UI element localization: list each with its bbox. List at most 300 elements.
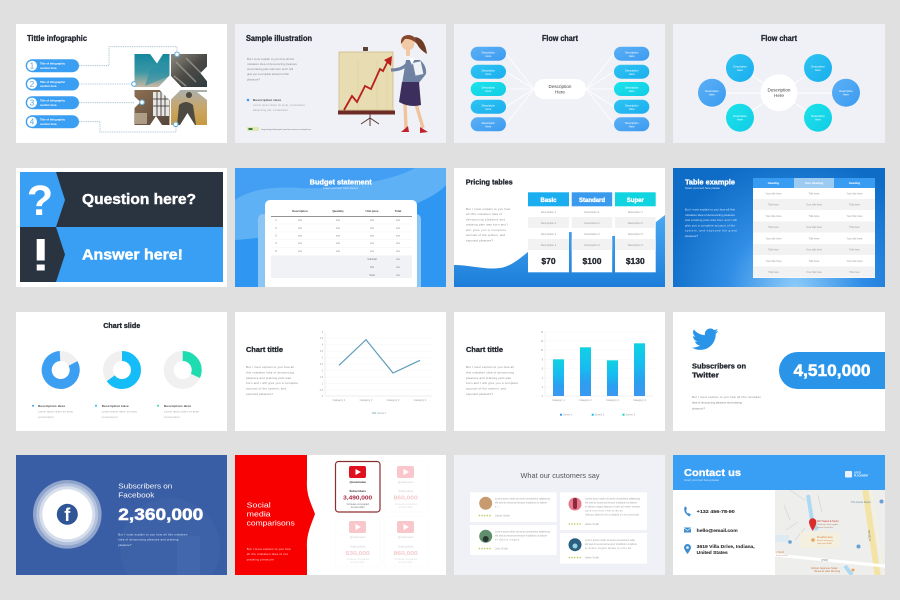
- left pills: Here: [485, 89, 492, 93]
- heading: Subscribers on Facebook: Facebook: [118, 490, 155, 500]
- legend item 1: Lorem ipsum dolor sit amet: [38, 410, 73, 414]
- testimonial 1: ★★★★★: [478, 514, 492, 518]
- data table: Title here: [809, 236, 820, 240]
- list item 4: section here.: [40, 122, 57, 126]
- budget table card: Unit price: [366, 209, 379, 213]
- list item 3: section here.: [40, 103, 57, 107]
- center circle: Description: [768, 88, 791, 92]
- legend item 3: consectetur: [164, 415, 180, 419]
- postal address: 3619 Villa Drive, Indiana,: [697, 544, 755, 549]
- list item 2: Title of infographic: [40, 80, 66, 84]
- card 2: faded: Increase compared: [395, 502, 417, 506]
- legend item 3: [157, 404, 199, 419]
- body paragraph: But I must explain to you how all this: [247, 57, 295, 61]
- budget table card: xxx: [396, 250, 401, 253]
- list item 1: 1: [30, 62, 35, 71]
- card 3: faded: 530,000: [346, 551, 370, 557]
- heading: Subscribers on Facebook: Subscribers on: [118, 482, 172, 490]
- budget table card: xxx: [396, 227, 401, 230]
- pricing card: Basic: $70: [541, 256, 556, 266]
- subscriber count pill: [779, 352, 885, 389]
- data table: Your title here: [847, 192, 863, 196]
- red side panel: [235, 455, 315, 575]
- connector lines: [506, 54, 614, 124]
- panel: title infographic slide: [16, 24, 227, 143]
- map: Wholesale food supplier: [817, 524, 839, 526]
- data table: Title here: [768, 270, 779, 274]
- budget table card: 1: [275, 218, 277, 222]
- card 1: highlighted: Subscribers: [349, 489, 366, 493]
- data table: Your title here: [766, 259, 782, 263]
- outer circles: Description: [811, 64, 825, 68]
- pricing card: Super: Description 4: [628, 243, 643, 247]
- panel: Facebook subscribers slide: [16, 455, 227, 575]
- map: (700): [821, 558, 828, 562]
- heading: Subscribers on Twitter: Twitter: [692, 370, 719, 380]
- pricing card: Standard: $100: [583, 256, 602, 266]
- body paragraph: pleasure?: [685, 234, 698, 238]
- postal address: United States: [697, 550, 728, 555]
- left pills: Description: [482, 86, 496, 90]
- small logo and footnote: Image designed by freepik, more free resources on freepik.com: [261, 128, 311, 131]
- data table: Title here: [768, 225, 779, 229]
- panel: budget statement slide: Insert your text here please: [323, 186, 359, 190]
- list item 4: Title of infographic: [40, 118, 66, 122]
- budget table card: [265, 200, 417, 290]
- outer circles: Here: [737, 68, 743, 72]
- icon: question mark: ?: [27, 177, 53, 225]
- testimonial 4: Lorem ipsum dolor sit amet consectetur adip: [585, 538, 636, 542]
- list item 2: section here.: [40, 84, 57, 88]
- body paragraph: But I must explain to you how all this mistaken: [118, 532, 188, 536]
- budget table card: Tax: [370, 265, 375, 269]
- line chart: [320, 332, 432, 415]
- budget table card: xxx: [336, 227, 341, 230]
- card 2: faded: @username: [398, 480, 414, 484]
- illustration: woman presenting growth chart: [338, 35, 428, 133]
- outer circles: Description: [811, 114, 825, 118]
- card 2: faded: to last video: [399, 505, 413, 509]
- icon: Twitter bird: [692, 328, 718, 350]
- card 1: highlighted: @username: [349, 480, 366, 484]
- body paragraph: will give you a complete: [466, 228, 506, 232]
- legend item 2: Lorem ipsum dolor sit amet: [102, 410, 137, 414]
- subscriber count pill: 4,510,000: [794, 361, 870, 380]
- testimonial 4: ★★★★★: [568, 556, 582, 560]
- stacked bar chart: 0: [542, 396, 544, 398]
- budget table card: xxx: [298, 219, 303, 222]
- body paragraph: account of the system, and: [466, 387, 506, 391]
- budget table card: 3: [275, 234, 277, 238]
- stacked bar chart: Category 4: [633, 398, 646, 402]
- panel: sample illustration slide: [235, 24, 446, 143]
- pricing card: Basic: Description 3: [541, 232, 557, 236]
- icon: Facebook rings: [33, 480, 102, 549]
- red side panel: Social: [247, 502, 271, 510]
- budget table card: Quantity: [332, 209, 344, 213]
- testimonial 3: Lorem ipsum dolor sit amet consectetur adipiscing: [585, 496, 641, 500]
- legend item 3: Lorem ipsum dolor sit amet: [164, 410, 199, 414]
- testimonial 2: ★★★★★: [478, 546, 492, 550]
- left pills: Description: [482, 103, 496, 107]
- budget table card: xxx: [336, 250, 341, 253]
- budget table card: xxx: [370, 234, 375, 238]
- body paragraph: account of the system, and: [466, 233, 505, 237]
- donut chart 1: [42, 351, 80, 389]
- line chart: 5: [322, 332, 324, 334]
- stacked bar chart: Category 1: [552, 398, 565, 402]
- map: Open from 8 AM: [817, 542, 832, 545]
- budget table card: xxx: [298, 227, 303, 230]
- legend item 1: [32, 404, 73, 419]
- left pills: Here: [485, 124, 492, 128]
- testimonial 1: Lorem ipsum dolor sit amet consectetur adipiscing: [495, 496, 551, 500]
- red side panel: media: [247, 512, 271, 518]
- panel: line chart slide: [235, 312, 446, 431]
- budget table card: xxx: [370, 227, 375, 230]
- data table: Your title here: [766, 236, 782, 240]
- pricing card: Standard: Description 4: [584, 243, 600, 247]
- body paragraph: all this mistaken idea of: [466, 212, 502, 216]
- heading: Sample illustration: Sample illustration: [246, 34, 312, 43]
- body paragraph: system, and expound the great: [685, 228, 737, 232]
- map: The Home Depot: [851, 500, 871, 504]
- pricing card: Basic: [528, 192, 569, 272]
- card 2: faded: Subscribers: [398, 489, 414, 493]
- budget table card: xxx: [396, 219, 401, 222]
- panel: Twitter subscribers slide: [673, 312, 885, 431]
- phone number: +132 456-78-90: [697, 509, 735, 514]
- outer circles: Here: [843, 92, 849, 96]
- map: Breakfast place: [817, 536, 834, 539]
- line chart: 3.5: [320, 351, 324, 353]
- testimonial 3: ★★★★★: [568, 522, 582, 526]
- pricing card: Standard: Description 3: [584, 232, 600, 236]
- testimonial 4: et dolore magna aliqua ut enim ad: [585, 546, 632, 550]
- data table: Title here: [809, 192, 820, 196]
- budget table card: xxx: [396, 234, 401, 238]
- panel: budget statement slide: [235, 168, 446, 294]
- body paragraph: pleasure and praising pain was: [466, 376, 512, 380]
- data table: Your title here: [766, 214, 782, 218]
- stacked bar chart: 10: [540, 350, 544, 352]
- budget table card: xxx: [298, 242, 303, 245]
- heading: Subscribers on Twitter: [692, 362, 746, 380]
- data table: Heading: [768, 181, 779, 185]
- legend item 3: Description Here: [164, 404, 191, 408]
- panel: flow chart pills slide: [454, 24, 665, 143]
- body paragraph: pleasure?: [118, 543, 132, 547]
- header band: LOGO: [854, 472, 861, 474]
- dashed connectors: [79, 47, 177, 132]
- donut chart 3: [169, 356, 197, 384]
- right pills: Description: [625, 68, 639, 72]
- budget table card: xxx: [396, 274, 401, 277]
- line chart: 4.5: [320, 338, 324, 340]
- center circle: [760, 74, 798, 111]
- icon: location pin: [684, 544, 691, 554]
- heading: Budget statement: Budget statement: [310, 180, 372, 186]
- outer circles: Here: [815, 118, 821, 122]
- body paragraph: idea of denouncing pleasure and praising: [118, 538, 179, 542]
- header band: PLACEMENT: [854, 474, 869, 478]
- body paragraph: [247, 57, 297, 82]
- map: [775, 488, 885, 578]
- left pills: Here: [485, 54, 492, 58]
- budget table card: xxx: [298, 234, 303, 238]
- right pills: Description: [625, 121, 639, 125]
- legend item 1: consectetur: [38, 415, 54, 419]
- outer circles: Here: [815, 68, 821, 72]
- data table: Your title here: [847, 214, 863, 218]
- budget table card: xxx: [336, 234, 341, 238]
- body paragraph: [692, 395, 761, 410]
- data table: Your title here: [806, 248, 823, 252]
- body paragraph: denouncing pleasure and: [466, 218, 505, 222]
- card 2: faded: 860,000: [394, 496, 418, 502]
- testimonial 2: [470, 525, 557, 555]
- line chart: 0: [322, 396, 324, 398]
- data table: [753, 178, 875, 278]
- pricing card: Super: Description 3: [628, 232, 643, 236]
- body paragraph: and praising pain was born and I will: [685, 218, 737, 222]
- right pills: Description: [625, 103, 639, 107]
- map: Kobuto Japanese Steak: [811, 567, 838, 570]
- testimonial 1: et.: [495, 504, 501, 508]
- map: Brunch restaurant: [817, 539, 833, 542]
- connector lines: [712, 68, 846, 118]
- body paragraph: this mistaken idea of denouncing: [246, 370, 294, 374]
- stacked bar chart: 6: [542, 368, 544, 370]
- line chart: Series 1: [377, 411, 387, 415]
- outer circles: Description: [705, 89, 719, 93]
- body paragraph: But I must explain to you how: [466, 207, 511, 211]
- budget table card: xxx: [370, 219, 375, 222]
- legend item 2: consectetur: [102, 415, 118, 419]
- outer circles: Here: [709, 92, 715, 96]
- icon: question mark: [20, 172, 65, 227]
- pricing card: Super: Super: [627, 198, 644, 204]
- bullet description: [247, 98, 305, 112]
- testimonial 3: quis nostrud exercitation: [585, 508, 624, 512]
- list item 3: Title of infographic: [40, 99, 66, 103]
- icon: Facebook rings: f: [64, 505, 71, 525]
- pricing card: Super: $130: [626, 256, 645, 266]
- panel: customer testimonials slide: [454, 455, 665, 575]
- pricing card: Super: Description 2: [628, 221, 643, 225]
- legend item 2: Description Here: [102, 404, 129, 408]
- body paragraph: pleasure and praising pain was: [246, 376, 292, 380]
- data table: Title here: [849, 202, 860, 206]
- outer circles: [698, 54, 860, 132]
- map: Indiana Food Hub: [817, 527, 834, 529]
- heading: Flow chart: Flow chart: [542, 34, 578, 43]
- budget table card: Subtotal: [367, 257, 377, 261]
- stacked bar chart: Category 2: [579, 398, 592, 402]
- icon: envelope: [684, 528, 691, 532]
- stacked bar chart: 2: [542, 387, 544, 389]
- outer circles: Here: [737, 118, 743, 122]
- list item 3: 3: [30, 99, 35, 108]
- heading: Question here?: Question here?: [82, 191, 196, 208]
- legend item 2: [95, 404, 137, 419]
- panel: chart slide with donuts: [16, 312, 227, 431]
- header band: Contact us: [684, 467, 741, 479]
- data table: Title here: [849, 270, 860, 274]
- body paragraph: [466, 365, 518, 396]
- pricing card: Standard: [572, 192, 612, 272]
- right pills: Description: [625, 86, 639, 90]
- pricing card: Super: Description 1: [628, 210, 643, 214]
- line chart: Category 1: [333, 398, 346, 402]
- right pills: Here: [629, 54, 635, 58]
- left pills: Description: [482, 68, 496, 72]
- body paragraph: pleasure?: [692, 406, 705, 410]
- budget table card: xxx: [336, 242, 341, 245]
- testimonial 4: elit sed do eiusmod tempor incididunt ut labore: [585, 542, 638, 546]
- list item 1: Title of infographic: [40, 62, 66, 66]
- bullet description: Lorem ipsum dolor sit amet, consectetur: [253, 103, 305, 107]
- card 4: faded: Increase compared: [395, 557, 417, 561]
- body paragraph: mistaken idea of denouncing pleasure: [247, 62, 297, 66]
- testimonial 1: [470, 492, 557, 522]
- card 4: faded: to last video: [399, 560, 413, 564]
- subscriber count: 2,360,000: [118, 505, 203, 524]
- pricing card: Basic: Basic: [540, 198, 557, 204]
- left pills: Description: [482, 121, 496, 125]
- panel: question and answer slide: [16, 168, 227, 287]
- map: J Sushi: [776, 551, 785, 554]
- stacked bar chart: Series 1: [563, 413, 573, 417]
- heading: Chart tittle: Chart tittle: [246, 345, 283, 354]
- testimonial 2: elit sed do eiusmod tempor incididunt ut labore: [495, 534, 548, 538]
- budget table card: Total: [395, 209, 401, 213]
- budget table card: Description: [292, 209, 308, 213]
- card 3: faded: to last video: [351, 560, 365, 564]
- budget table card: xxx: [370, 250, 375, 253]
- center node: Description: [549, 84, 572, 89]
- card 3: faded: @username: [350, 535, 366, 539]
- panel: table example slide: [673, 168, 885, 287]
- card 3: faded: [336, 516, 380, 567]
- pricing card: Standard: Description 1: [584, 210, 600, 214]
- line chart: 1: [322, 384, 324, 386]
- data table: Your title here: [766, 192, 782, 196]
- panel: contact us slide: [673, 455, 885, 578]
- heading: Flow chart: Flow chart: [761, 34, 797, 43]
- body paragraph: But I must explain to you how all this: [685, 208, 736, 212]
- testimonial 3: Helen Smith: [585, 522, 600, 526]
- pricing card: Basic: Description 1: [541, 210, 557, 214]
- data table: Title here: [768, 248, 779, 252]
- panel: flow chart circles slide: [673, 24, 885, 143]
- body paragraph: idea of denouncing pleasure and praising: [692, 400, 742, 404]
- list item 2: [26, 78, 79, 90]
- email address: hello@email.com: [697, 528, 738, 533]
- header band: Insert your text here please: [684, 478, 719, 482]
- list item 1: section here.: [40, 66, 57, 70]
- list item 4: 4: [30, 118, 35, 127]
- data table: Title here: [809, 214, 820, 218]
- heading: Subscribers on Facebook: [118, 483, 172, 498]
- stacked bar chart: 12: [540, 341, 544, 343]
- budget table card: 5: [275, 249, 277, 253]
- bullet description: Description Here: [253, 98, 281, 102]
- heading: Answer here!: Answer here!: [82, 246, 183, 264]
- body paragraph: [466, 207, 511, 242]
- stacked bar chart: Category 3: [606, 398, 619, 402]
- line chart: Category 2: [360, 398, 373, 402]
- body paragraph: [246, 365, 298, 396]
- heading: What our customers say: What our customers say: [520, 471, 600, 480]
- card 1: highlighted: to last video: [351, 505, 365, 509]
- body paragraph: give you a complete account of the: [685, 223, 735, 227]
- heading: Chart slide: Chart slide: [103, 321, 140, 330]
- line chart: 1.5: [320, 377, 324, 379]
- body paragraph: and praising pain was born and I will: [247, 67, 293, 71]
- map: MZ Traded & Sushi: [817, 520, 839, 523]
- testimonial 4: [560, 533, 647, 564]
- data table: Your title here: [806, 270, 823, 274]
- red side panel: comparisons: [247, 520, 295, 528]
- postal address: [697, 544, 755, 555]
- body paragraph: expound pleasure?: [466, 238, 493, 242]
- map: House at Lake Running: [814, 570, 841, 573]
- panel: bar chart slide: [454, 312, 665, 431]
- panel: pricing tables slide: [454, 168, 665, 287]
- list item 2: 2: [30, 80, 35, 89]
- data table: Your title here: [806, 202, 823, 206]
- pricing card: Standard: Standard: [579, 198, 605, 204]
- center circle: Here: [774, 93, 784, 98]
- body paragraph: born and I will give you a complete: [466, 381, 518, 385]
- body paragraph: born and I will give you a complete: [246, 381, 298, 385]
- card 4: faded: @username: [398, 535, 414, 539]
- left pills: Here: [485, 72, 492, 76]
- right pills: Here: [629, 89, 635, 93]
- pricing card: Basic: Description 2: [541, 221, 557, 225]
- left pills: Description: [482, 50, 496, 54]
- right pills: [614, 47, 649, 131]
- map: Sushi and bar: [776, 555, 789, 557]
- card 1: highlighted: Increase compared: [347, 502, 369, 506]
- panel: social media comparisons slide: [235, 455, 446, 575]
- heading: Tittle infographic: Tittle infographic: [27, 34, 88, 43]
- budget table card: xxx: [370, 242, 375, 245]
- legend item 1: Description Here: [38, 404, 65, 408]
- stacked bar chart: 14: [540, 332, 544, 334]
- card 1: highlighted: 3,490,000: [343, 496, 372, 502]
- body paragraph: this mistaken idea of denouncing: [466, 370, 514, 374]
- outer circles: Description: [733, 64, 747, 68]
- body paragraph: But I must explain to you how all this mistaken: [692, 395, 761, 399]
- data table: Heading: [849, 181, 860, 185]
- budget table card: xxx: [298, 250, 303, 253]
- heading: Table example: Table example: [685, 178, 735, 186]
- small logo and footnote: [247, 127, 311, 131]
- body paragraph: [118, 534, 188, 546]
- header band: [673, 455, 885, 490]
- testimonial 3: elit sed do eiusmod tempor incididunt ut labore: [585, 500, 638, 504]
- testimonial 4: Helen Smith: [585, 556, 600, 560]
- right pills: Here: [629, 124, 635, 128]
- body paragraph: But I must explain to you how all: [246, 365, 294, 369]
- body paragraph: But I must explain to you how all: [466, 365, 514, 369]
- list item 1: [26, 59, 79, 72]
- panel: table example slide: Insert your text here please: [685, 186, 720, 190]
- data table: Title here: [809, 259, 820, 263]
- pricing card: Standard: Description 2: [584, 221, 600, 225]
